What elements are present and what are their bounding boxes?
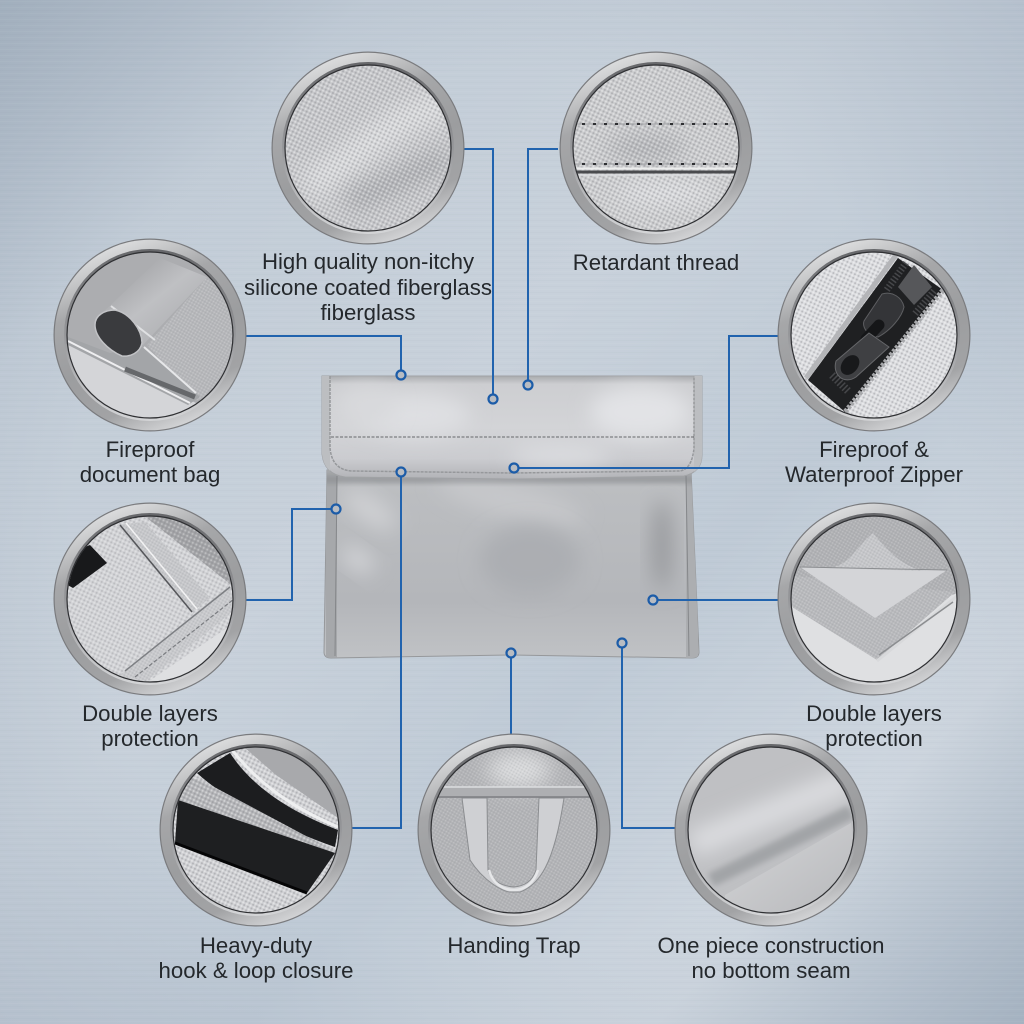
bag flap (322, 376, 702, 479)
label: one piece construction: no bottom seam (691, 958, 851, 983)
label: hook and loop closure (159, 933, 353, 983)
label: double layers left: protection (101, 726, 199, 751)
connector lines (246, 149, 778, 828)
label: hook and loop closure: Heavy-duty (200, 933, 313, 958)
detail: rolled bag edge (54, 238, 246, 432)
bag body (320, 463, 705, 660)
zipper slider (835, 293, 904, 380)
label: zipper: Fireproof & (819, 437, 929, 462)
detail: handle (418, 734, 610, 926)
label: double layers right: Double layers (806, 701, 942, 726)
detail: double layer corner right (778, 502, 970, 696)
connector dots (332, 370, 658, 658)
detail: silicone coated fiberglass (272, 52, 464, 244)
label: hook and loop closure: hook & loop closure (159, 958, 353, 983)
label: double layers left: Double layers (82, 701, 218, 726)
label: high quality fiberglass: fiberglass (321, 300, 415, 325)
main product: silver document bag (320, 376, 705, 660)
detail: double layer seam left (54, 502, 246, 696)
detail: one piece fold (674, 734, 868, 926)
label: high quality fiberglass: High quality non-itchy (262, 249, 475, 274)
label: fireproof document bag: document bag (80, 462, 220, 487)
label: zipper: Waterproof Zipper (785, 462, 964, 487)
label: high quality fiberglass: silicone coated fiberglass (244, 275, 492, 300)
label: retardant thread: Retardant thread (573, 250, 739, 275)
detail: hook and loop (160, 734, 352, 926)
label: double layers left (82, 701, 218, 751)
label: one piece construction: One piece construction (658, 933, 884, 958)
label: fireproof document bag: Fireproof (106, 437, 195, 462)
label: double layers right: protection (825, 726, 923, 751)
label: high quality fiberglass (244, 249, 492, 325)
label: fireproof document bag (80, 437, 220, 487)
label: double layers right (806, 701, 942, 751)
label: one piece construction (658, 933, 884, 983)
label: handing trap: Handing Trap (447, 933, 581, 958)
detail: retardant thread (560, 52, 752, 244)
detail: zipper (778, 238, 970, 432)
label: zipper (785, 437, 964, 487)
